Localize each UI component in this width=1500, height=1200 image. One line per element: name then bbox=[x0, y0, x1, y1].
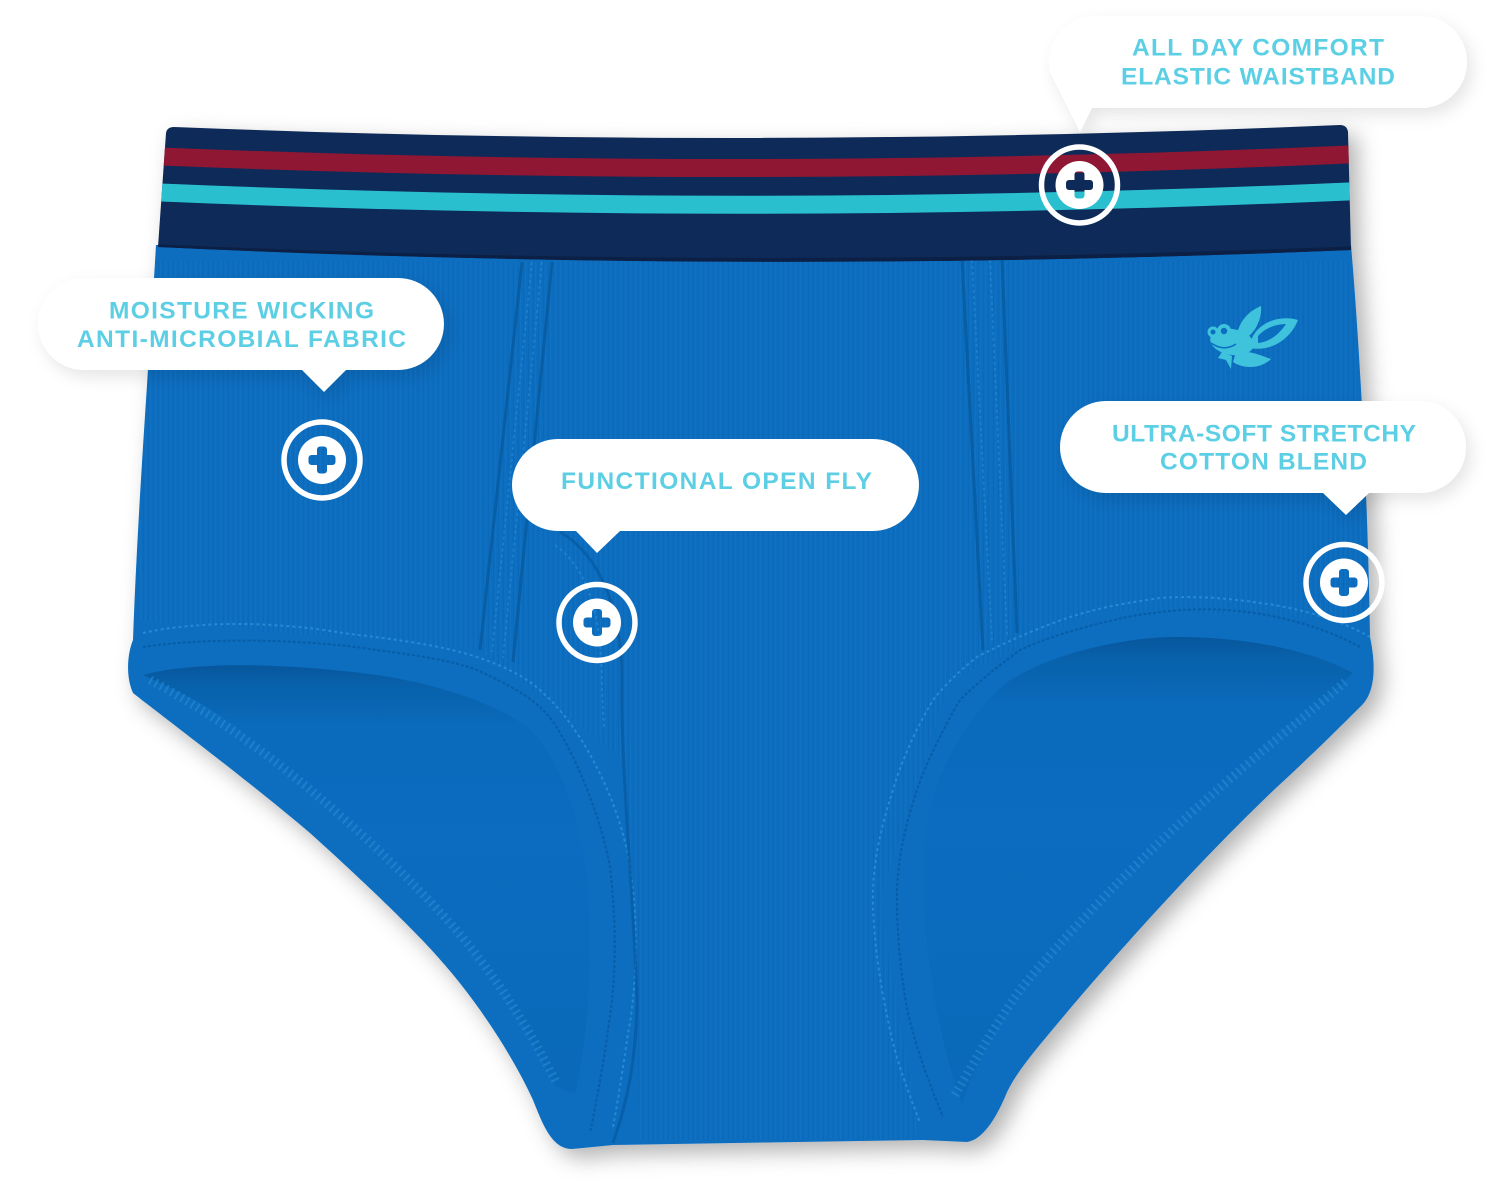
icon: plus marker waistband bbox=[1042, 147, 1118, 223]
left hem zigzag bbox=[150, 680, 556, 1082]
callout: functional open fly bbox=[512, 439, 919, 553]
right leg opening bbox=[923, 637, 1353, 1105]
fabric rib texture bbox=[136, 262, 1366, 1140]
left leg opening bbox=[143, 665, 590, 1094]
waistband red stripe bbox=[150, 154, 1360, 168]
callout: ultra-soft stretchy cotton blend: ULTRA-SOFT STRETCHY bbox=[1112, 420, 1416, 448]
leg binding stitching bbox=[143, 597, 1370, 1133]
callout: all day comfort elastic waistband: ALL DAY COMFORT bbox=[1132, 34, 1384, 62]
icon: plus marker fabric bbox=[284, 422, 360, 498]
waistband bbox=[150, 154, 1360, 260]
callout: all day comfort elastic waistband bbox=[1049, 16, 1467, 132]
icon: plus marker open fly bbox=[559, 584, 635, 660]
callout: moisture wicking anti-microbial fabric: MOISTURE WICKING bbox=[109, 298, 374, 324]
waistband teal stripe bbox=[150, 191, 1360, 205]
waistband lower shadow bbox=[150, 246, 1360, 260]
callout: ultra-soft stretchy cotton blend: COTTON BLEND bbox=[1160, 448, 1367, 476]
garment: blue briefs bbox=[128, 125, 1374, 1149]
callout: moisture wicking anti-microbial fabric bbox=[38, 278, 444, 392]
callout: functional open fly: FUNCTIONAL OPEN FLY bbox=[561, 468, 872, 495]
right hem zigzag bbox=[955, 682, 1345, 1095]
callout: ultra-soft stretchy cotton blend bbox=[1060, 401, 1466, 515]
icon: fish logo bbox=[1208, 306, 1298, 369]
callout: all day comfort elastic waistband: ELASTIC WAISTBAND bbox=[1121, 64, 1395, 90]
front panel seams and fly bbox=[480, 260, 1017, 1143]
garment silhouette with shadow bbox=[128, 125, 1374, 1149]
callout: moisture wicking anti-microbial fabric: ANTI-MICROBIAL FABRIC bbox=[77, 326, 406, 353]
icon: plus marker stretchy cotton bbox=[1306, 544, 1382, 620]
